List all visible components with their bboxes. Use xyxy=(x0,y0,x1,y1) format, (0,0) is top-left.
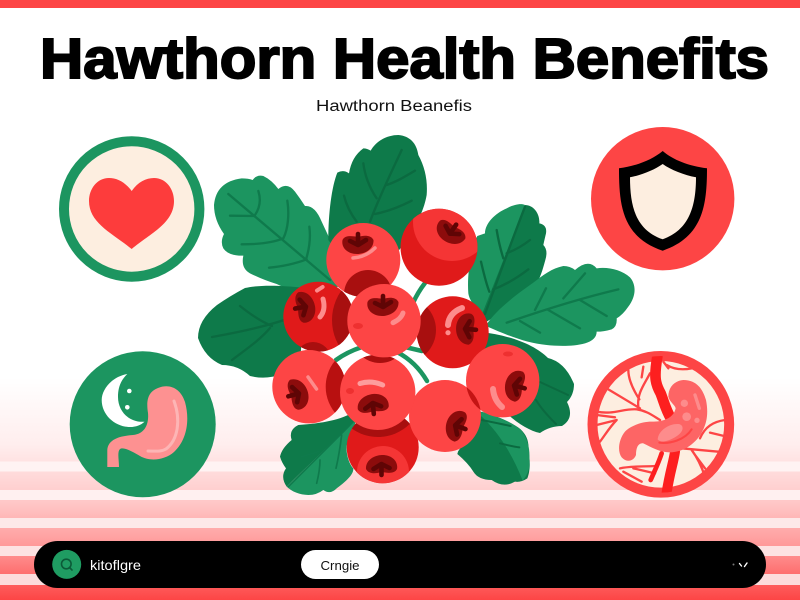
bar icon: small chevrons xyxy=(732,563,747,566)
stomach xyxy=(107,386,187,467)
leaf: right light xyxy=(487,264,635,346)
subtitle: Hawthorn Beanefis xyxy=(316,98,472,115)
stomach details xyxy=(658,395,700,443)
berry: centre xyxy=(347,284,421,357)
title: Hawthorn Health Benefits xyxy=(40,27,769,91)
leaf: upper left xyxy=(214,176,340,291)
berry: bottom xyxy=(346,418,419,484)
icon: heart xyxy=(64,141,199,277)
illustration: hawthorn berries and leaves xyxy=(198,135,635,498)
leaf: upright right xyxy=(468,204,546,322)
leaf: lower right dark xyxy=(480,332,574,433)
berry: middle right xyxy=(417,296,489,368)
berry: lower middle right xyxy=(409,380,481,452)
bar label: kitoflgre xyxy=(90,557,141,573)
moon dots xyxy=(125,389,132,410)
top red band xyxy=(0,0,800,8)
icon: stomach with blood vessels xyxy=(592,356,729,497)
leaf: left dark xyxy=(198,286,305,378)
stems xyxy=(336,283,427,381)
vessels xyxy=(597,357,727,497)
bottom navigation bar xyxy=(34,541,766,588)
icon: shield xyxy=(591,127,734,270)
berry: lower left xyxy=(272,350,344,424)
leaf: bottom left xyxy=(280,412,356,495)
berry: top left xyxy=(326,223,400,296)
leaf: bottom right xyxy=(457,412,530,485)
berry: lower right xyxy=(466,344,539,417)
bar icon: green search circle xyxy=(52,550,81,579)
berry: middle left xyxy=(283,282,352,352)
berry: lower centre xyxy=(340,355,416,430)
stomach xyxy=(619,380,707,461)
bar button: Crngie xyxy=(320,558,360,573)
leaf: upper centre dark xyxy=(328,135,427,257)
stomach highlight xyxy=(148,401,178,451)
berry: top right xyxy=(400,208,478,286)
icon: stomach and moon xyxy=(70,351,216,497)
moon xyxy=(102,374,144,427)
bar button xyxy=(301,550,379,579)
